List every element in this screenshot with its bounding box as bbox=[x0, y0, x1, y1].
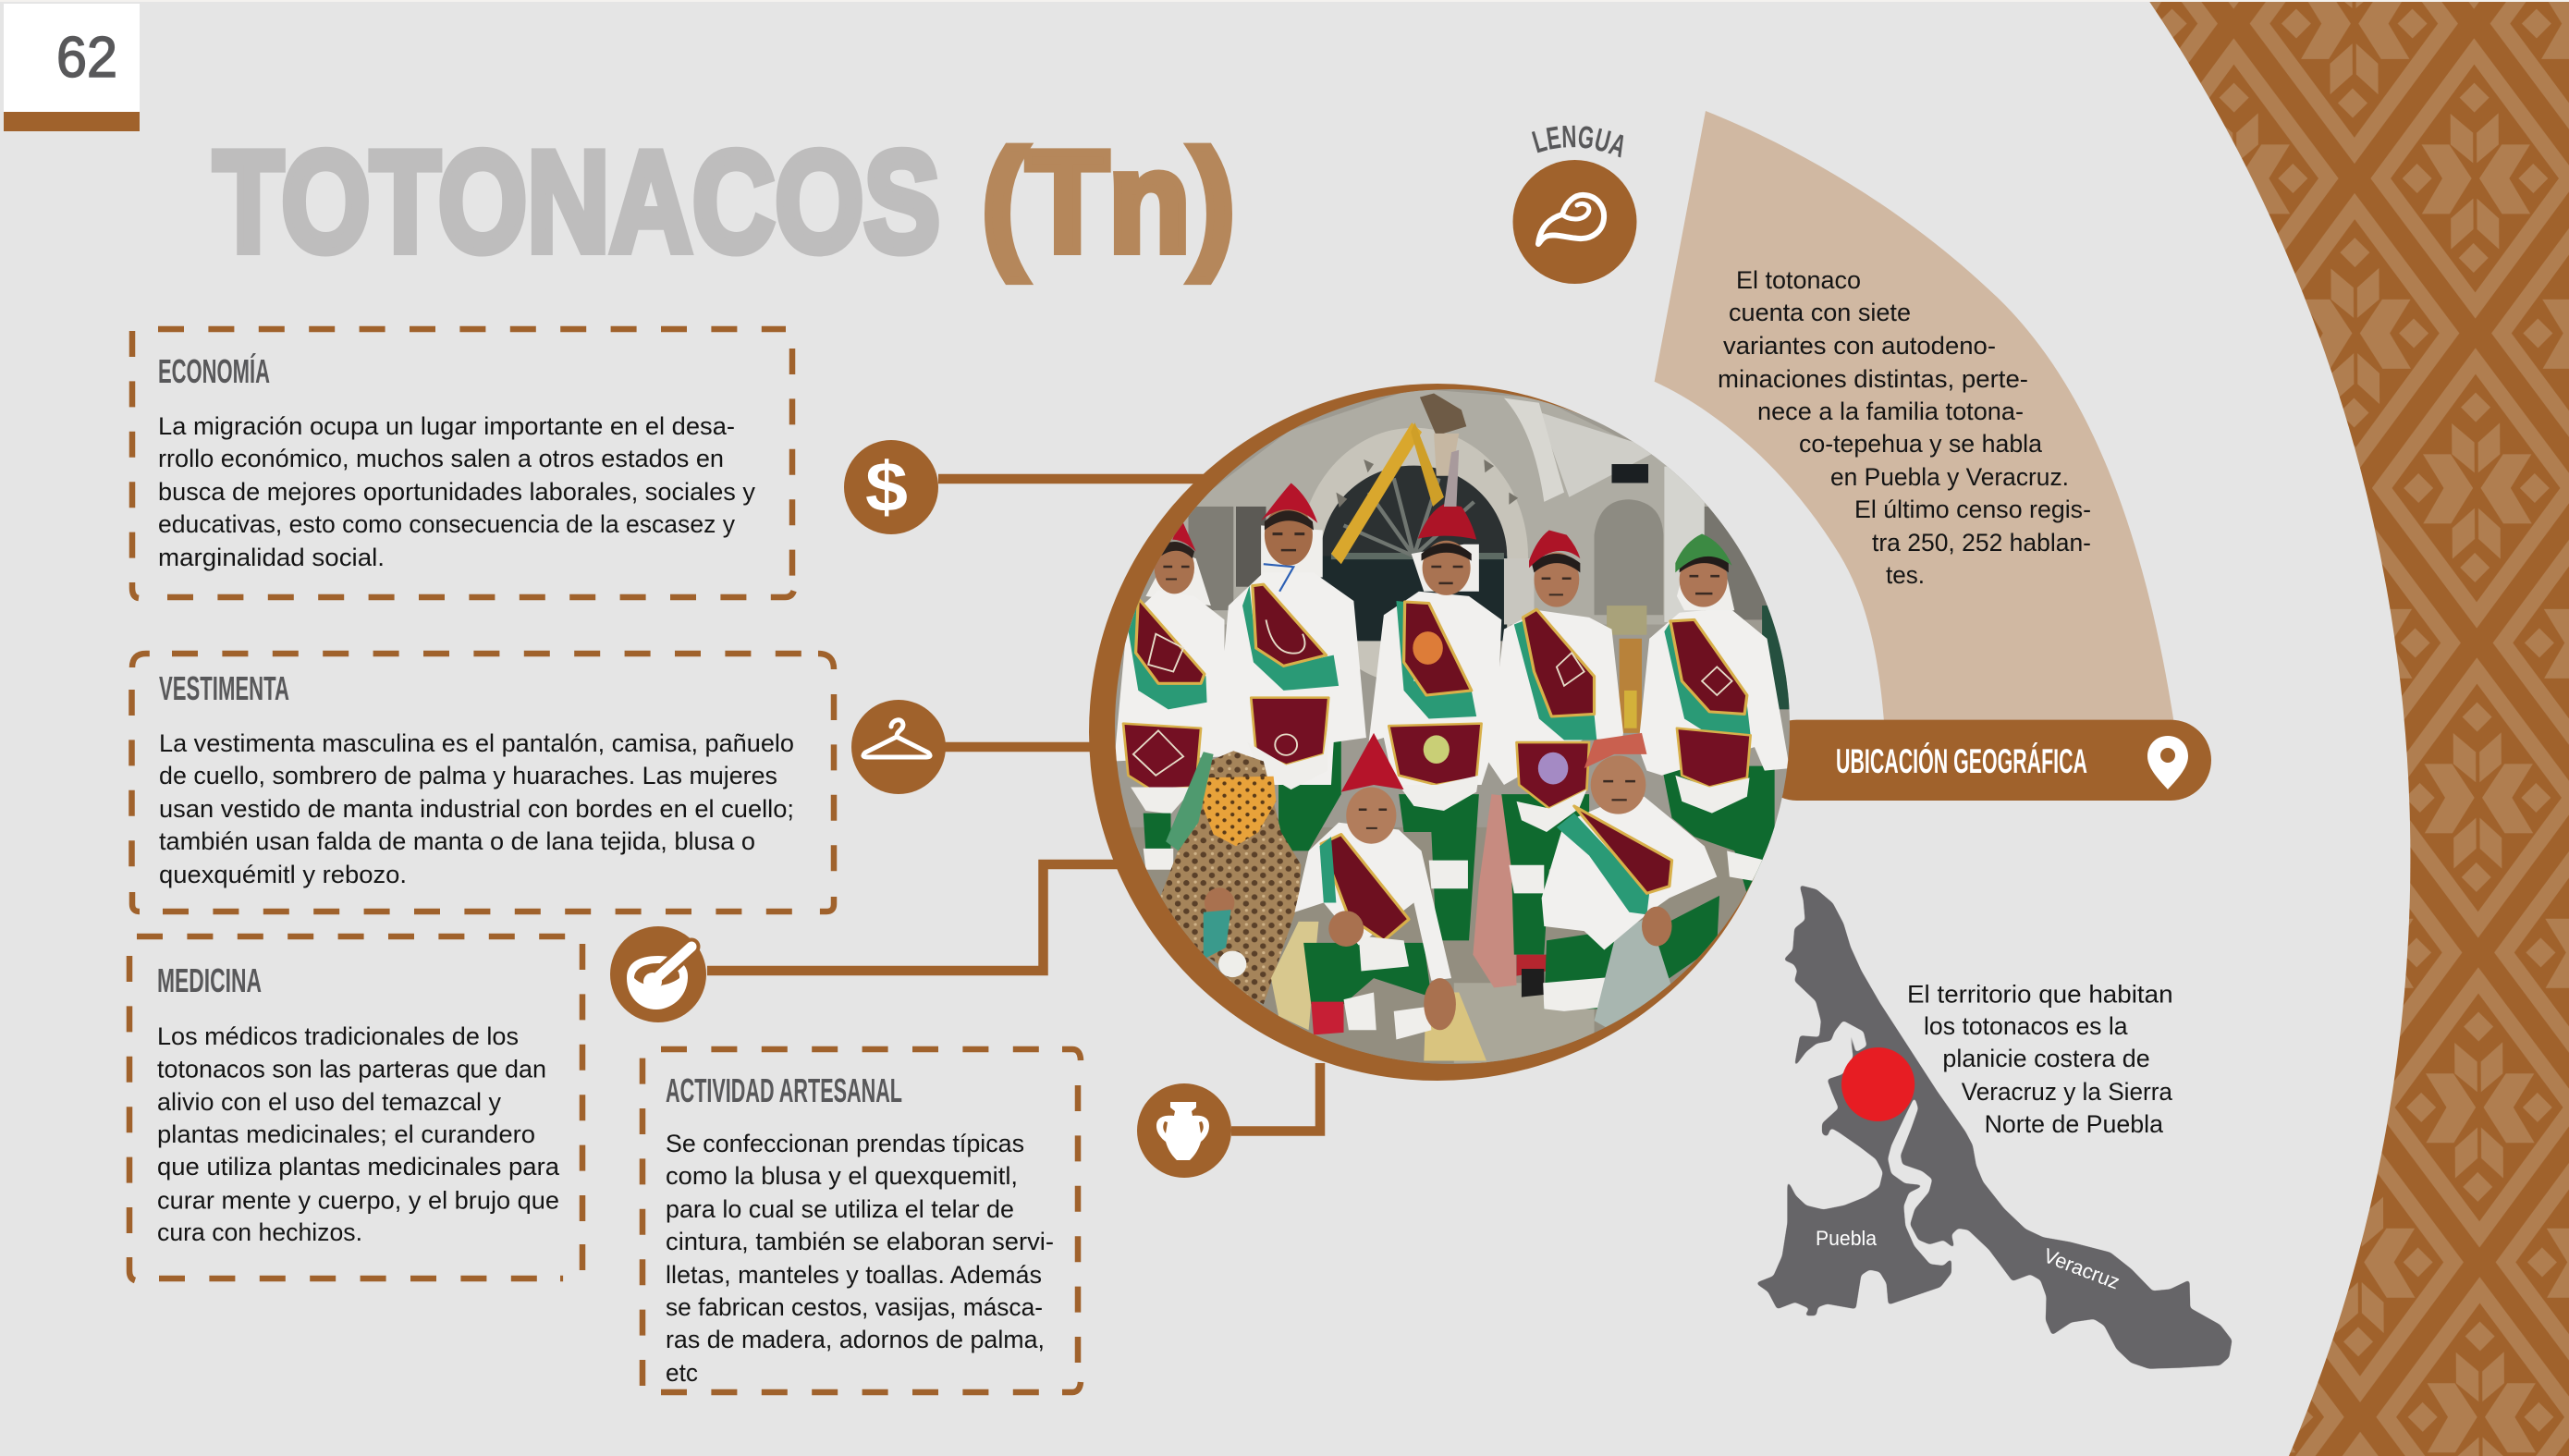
title: TOTONACOS bbox=[214, 122, 940, 281]
text: territory description: Veracruz y la Sierra bbox=[1962, 1078, 2173, 1106]
text: vestimenta: de cuello, sombrero de palma y huaraches. Las mujeres bbox=[159, 762, 777, 789]
marker: Totonac territory bbox=[1841, 1047, 1915, 1121]
photo: totonac dancers bbox=[1115, 389, 1790, 1064]
text: lengua: co-tepehua y se habla bbox=[1799, 430, 2043, 458]
text: medicina: totonacos son las parteras que dan bbox=[157, 1056, 546, 1083]
text: lengua: variantes con autodeno- bbox=[1723, 332, 1996, 360]
text: actividad artesanal: etc bbox=[666, 1359, 698, 1387]
panel: medicina bbox=[129, 936, 582, 1280]
text: territory description bbox=[1907, 980, 2173, 1138]
panel: vestimenta bbox=[131, 654, 834, 912]
scarf bbox=[1473, 794, 1517, 987]
text: medicina bbox=[157, 1022, 560, 1246]
panel: economía bbox=[132, 329, 794, 598]
icon: dollar: $ bbox=[865, 448, 908, 527]
heading: vestimenta: VESTIMENTA bbox=[159, 669, 289, 707]
heading: economía: ECONOMÍA bbox=[158, 352, 270, 390]
map: Puebla and Veracruz bbox=[1757, 886, 2232, 1368]
text: lengua: minaciones distintas, perte- bbox=[1718, 365, 2028, 393]
text: lengua bbox=[1718, 266, 2091, 589]
text: medicina: que utiliza plantas medicinales para bbox=[157, 1153, 560, 1181]
photo ring bbox=[1089, 384, 1786, 1081]
text: vestimenta bbox=[159, 729, 794, 888]
icon: clay jar bbox=[1137, 1083, 1231, 1178]
text: vestimenta: también usan falda de manta o de lana tejida, blusa o bbox=[159, 827, 755, 855]
icon: clothes hanger bbox=[851, 700, 946, 794]
label: Veracruz: Veracruz bbox=[2040, 1243, 2122, 1293]
text: lengua: tes. bbox=[1886, 561, 1925, 589]
figure D bbox=[1501, 794, 1589, 955]
text: medicina: alivio con el uso del temazcal y bbox=[157, 1088, 501, 1116]
text: economía: educativas, esto como consecuencia de la escasez y bbox=[158, 510, 735, 538]
text: economía bbox=[158, 412, 755, 571]
icon: lengua with curved label: LENGUA bbox=[1531, 126, 1623, 157]
location bar: UBICACIÓN GEOGRÁFICA bbox=[1836, 741, 2087, 780]
panel: actividad artesanal bbox=[642, 1049, 1081, 1392]
location bar bbox=[1756, 720, 2211, 801]
text: economía: marginalidad social. bbox=[158, 544, 385, 571]
icon: lengua with curved label bbox=[1512, 126, 1636, 284]
text: vestimenta: La vestimenta masculina es el pantalón, camisa, pañuelo bbox=[159, 729, 794, 757]
text: actividad artesanal: cintura, también se elaboran servi- bbox=[666, 1228, 1054, 1255]
text: actividad artesanal: como la blusa y el quexquemitl, bbox=[666, 1162, 1018, 1190]
text: actividad artesanal bbox=[666, 1130, 1054, 1387]
kneeling child F bbox=[1271, 922, 1318, 1030]
text: medicina: cura con hechizos. bbox=[157, 1218, 362, 1246]
text: economía: La migración ocupa un lugar importante en el desa- bbox=[158, 412, 735, 440]
text: territory description: planicie costera de bbox=[1942, 1045, 2150, 1072]
text: vestimenta: usan vestido de manta industrial con bordes en el cuello; bbox=[159, 795, 794, 823]
heading: actividad artesanal: ACTIVIDAD ARTESANAL bbox=[666, 1071, 902, 1109]
text: medicina: Los médicos tradicionales de los bbox=[157, 1022, 519, 1050]
text: actividad artesanal: para lo cual se utiliza el telar de bbox=[666, 1195, 1014, 1223]
figure E bbox=[1662, 766, 1775, 903]
text: lengua: El totonaco bbox=[1736, 266, 1861, 294]
panel: lengua fan bbox=[1655, 111, 2175, 730]
text: lengua: tra 250, 252 hablan- bbox=[1872, 529, 2091, 557]
text: actividad artesanal: se fabrican cestos, vasijas, másca- bbox=[666, 1293, 1043, 1321]
text: lengua: El último censo regis- bbox=[1854, 496, 2091, 523]
icon: mortar and pestle bbox=[610, 926, 706, 1022]
text: vestimenta: quexquémitl y rebozo. bbox=[159, 861, 407, 888]
figure B bbox=[1261, 525, 1323, 577]
text: lengua: nece a la familia totona- bbox=[1757, 398, 2024, 425]
heading: medicina: MEDICINA bbox=[157, 961, 262, 999]
connector lines from icons to the photo bbox=[707, 479, 1320, 1132]
icon: dollar bbox=[844, 440, 938, 534]
label: Puebla: Puebla bbox=[1816, 1227, 1878, 1250]
icon: map pin bbox=[2147, 736, 2188, 789]
text: actividad artesanal: lletas, manteles y toallas. Además bbox=[666, 1261, 1042, 1289]
text: economía: rrollo económico, muchos salen a otros estados en bbox=[158, 445, 724, 472]
text: lengua: en Puebla y Veracruz. bbox=[1830, 463, 2069, 491]
text: lengua: cuenta con siete bbox=[1729, 299, 1911, 326]
text: medicina: plantas medicinales; el curandero bbox=[157, 1120, 535, 1148]
title: (Tn) bbox=[982, 122, 1235, 281]
text: medicina: curar mente y cuerpo, y el brujo que bbox=[157, 1187, 559, 1215]
figure C bbox=[1412, 544, 1479, 592]
text: territory description: Norte de Puebla bbox=[1985, 1110, 2164, 1138]
kneeling child G bbox=[1544, 896, 1719, 1009]
text: territory description: El territorio que habitan bbox=[1907, 980, 2173, 1008]
text: actividad artesanal: ras de madera, adornos de palma, bbox=[666, 1326, 1045, 1353]
text: actividad artesanal: Se confeccionan prendas típicas bbox=[666, 1130, 1024, 1157]
figure A bbox=[1146, 557, 1211, 606]
text: economía: busca de mejores oportunidades laborales, sociales y bbox=[158, 478, 755, 506]
text: territory description: los totonacos es la bbox=[1924, 1012, 2129, 1040]
page number tab: 62 bbox=[56, 26, 117, 90]
page number tab bbox=[4, 4, 140, 131]
jaguar child bbox=[1161, 751, 1301, 1004]
